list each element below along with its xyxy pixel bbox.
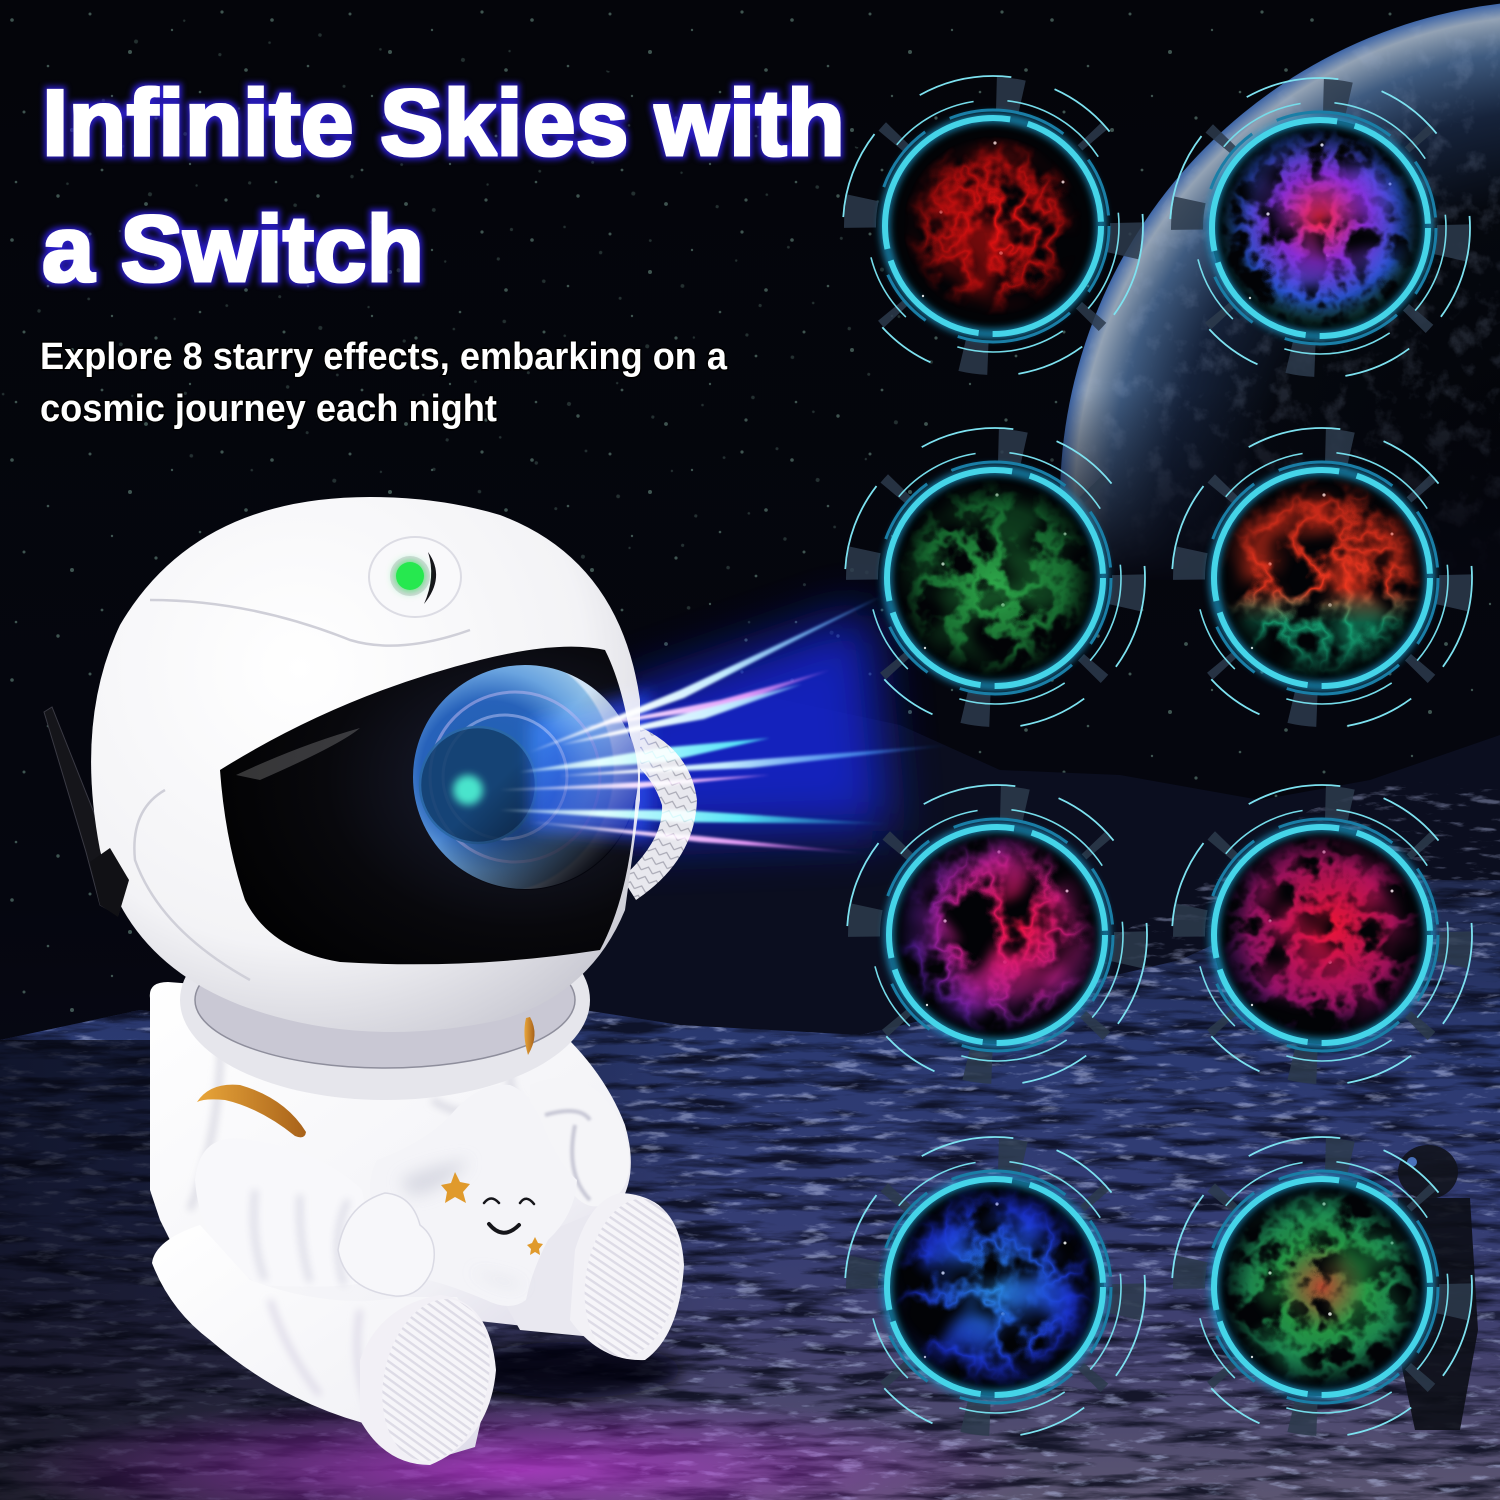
title: Infinite Skies with [42, 70, 845, 175]
effect circle 5: purple and red [847, 785, 1147, 1085]
effect circle 1: red [843, 76, 1143, 376]
effect circle 3: green [845, 428, 1145, 728]
lunar ground [0, 880, 1500, 1500]
left leg [152, 1225, 494, 1463]
effect circle 4: red and green [1172, 428, 1472, 728]
effect circle 8: green and blue [1172, 1137, 1472, 1437]
star plush [370, 1085, 577, 1306]
torso fold shading [190, 1000, 530, 1210]
button with green light [369, 537, 461, 617]
title: a Switch [42, 196, 424, 301]
subtitle [40, 336, 728, 430]
title [42, 70, 845, 301]
left arm [195, 1138, 380, 1287]
effect circle 2: multicolour [1170, 78, 1470, 378]
subtitle: Explore 8 starry effects, embarking on a [40, 336, 728, 378]
right boot [570, 1191, 691, 1365]
icon: small gold stars [441, 1172, 543, 1255]
helmet shell [91, 497, 640, 1032]
effect circle 6: crimson [1172, 785, 1472, 1085]
helmet seam lines [134, 600, 470, 980]
subtitle: cosmic journey each night [40, 388, 497, 430]
back strap [616, 722, 697, 900]
effect circle 7: blue [845, 1137, 1145, 1437]
projector lens [412, 664, 638, 890]
hand with thumb [338, 1193, 434, 1296]
left boot [360, 1289, 504, 1471]
side earpiece [90, 848, 129, 917]
icon: antenna [44, 707, 128, 915]
smile face [484, 1198, 534, 1233]
small distant astronaut figure [1392, 1145, 1478, 1430]
blue projection haze [610, 610, 890, 840]
lens beam haze [530, 690, 650, 840]
astronaut projector [44, 497, 697, 1471]
collar [180, 900, 590, 1100]
gold shoulder stripes [197, 1017, 535, 1137]
visor [220, 647, 636, 964]
light beams [500, 596, 962, 854]
right leg [480, 1210, 625, 1340]
right arm [530, 1078, 630, 1206]
astronaut torso [150, 982, 631, 1330]
planet [1050, 4, 1500, 572]
distant mountains [500, 695, 1500, 1060]
